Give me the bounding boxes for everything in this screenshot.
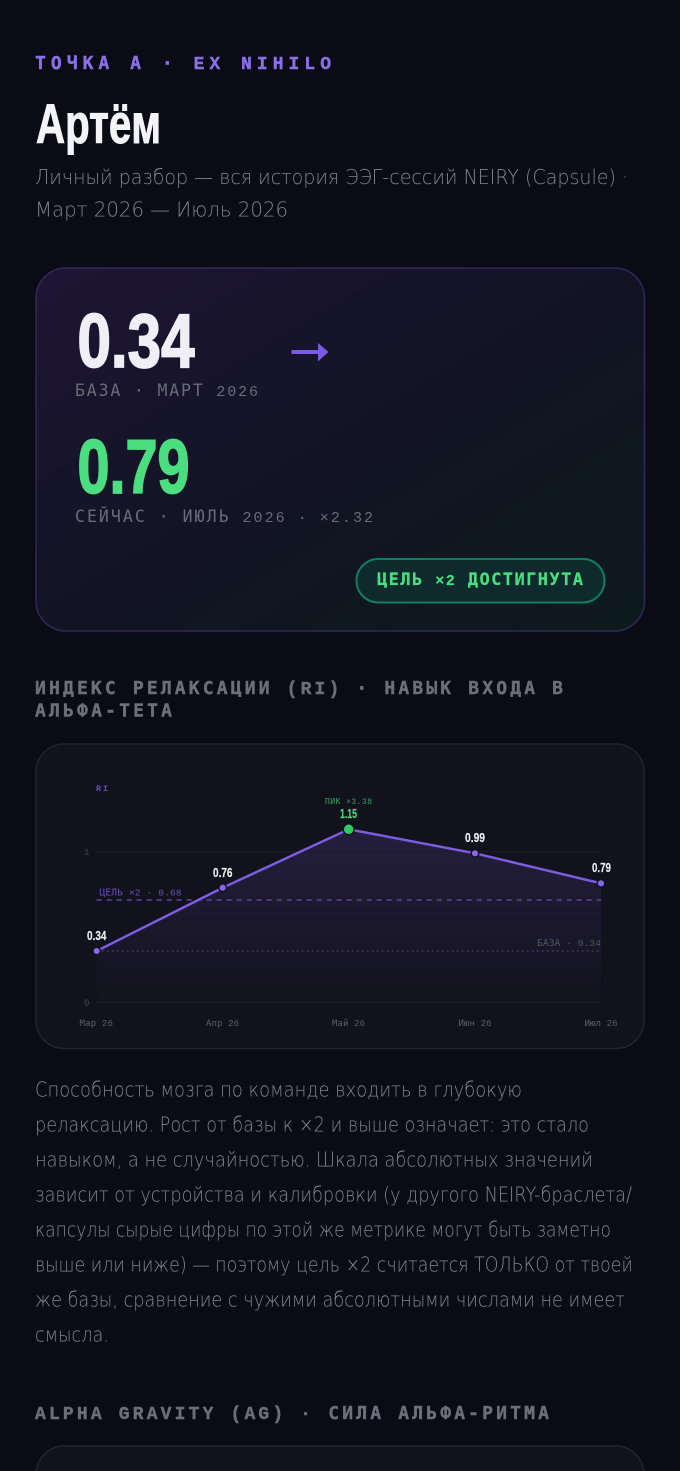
area fill <box>97 829 601 1002</box>
x axis labels: Мар 26 <box>80 1019 113 1029</box>
value labels: 0.76 <box>213 866 233 880</box>
value labels <box>87 807 611 943</box>
current caption: СЕЙЧАС · ИЮЛЬ 2026 · ×2.32 <box>75 507 373 527</box>
goal badge: ЦЕЛЬ ×2 ДОСТИГНУТА <box>377 570 583 590</box>
value labels: 0.99 <box>465 831 485 845</box>
base line <box>97 950 601 952</box>
heading: relaxation index <box>35 678 563 722</box>
heading: relaxation index: ИНДЕКС РЕЛАКСАЦИИ (RI) · НАВЫК ВХОДА В <box>35 678 563 700</box>
base label: БАЗА · 0.34 <box>537 938 601 949</box>
y axis labels: 0 <box>84 998 89 1008</box>
subtitle <box>35 165 628 222</box>
value labels: 0.34 <box>87 929 107 943</box>
icon: arrow <box>292 343 328 362</box>
title: Артём <box>36 92 161 155</box>
body text: навыком, а не случайностью. Шкала абсолютных значений <box>35 1148 593 1172</box>
current value: 0.79 <box>78 425 190 510</box>
panel: RI chart <box>36 744 644 1048</box>
panel: hero result <box>36 268 644 631</box>
y axis labels: RI <box>96 784 108 794</box>
x axis labels <box>80 1019 618 1029</box>
heading: relaxation index: АЛЬФА-ТЕТА <box>35 700 172 722</box>
hero card background <box>36 268 644 631</box>
value labels: 0.79 <box>592 861 611 875</box>
peak point <box>343 824 354 835</box>
goal badge <box>356 559 604 602</box>
value labels: 1.15 <box>340 807 357 821</box>
peak label: ПИК ×3.38 <box>325 797 372 807</box>
body text: смысла. <box>35 1322 109 1346</box>
chart card background <box>36 744 644 1048</box>
body text: Способность мозга по команде входить в глубокую <box>35 1078 522 1102</box>
heading: alpha gravity: ALPHA GRAVITY (AG) · СИЛА АЛЬФА-РИТМА <box>35 1403 549 1425</box>
goal line <box>97 899 601 901</box>
data line <box>97 829 601 951</box>
goal label: ЦЕЛЬ ×2 · 0.68 <box>100 888 182 898</box>
y axis labels: 1 <box>84 848 89 858</box>
body text: релаксацию. Рост от базы к ×2 и выше означает: это стало <box>35 1112 589 1136</box>
x axis labels: Июл 26 <box>584 1019 618 1029</box>
y axis labels <box>84 784 108 1008</box>
data points <box>93 850 605 955</box>
eyebrow: ТОЧКА А · EX NIHILO <box>35 53 331 75</box>
body text <box>35 1078 633 1346</box>
panel: AG chart <box>36 1446 644 1471</box>
subtitle: Личный разбор — вся история ЭЭГ-сессий NEIRY (Capsule) · <box>35 165 628 189</box>
x axis labels: Июн 26 <box>458 1019 492 1029</box>
x axis labels: Май 26 <box>332 1019 365 1029</box>
base value: 0.34 <box>78 299 194 384</box>
x axis labels: Апр 26 <box>206 1019 239 1029</box>
subtitle: Март 2026 — Июль 2026 <box>35 198 288 222</box>
base caption: БАЗА · МАРТ 2026 <box>75 381 258 401</box>
